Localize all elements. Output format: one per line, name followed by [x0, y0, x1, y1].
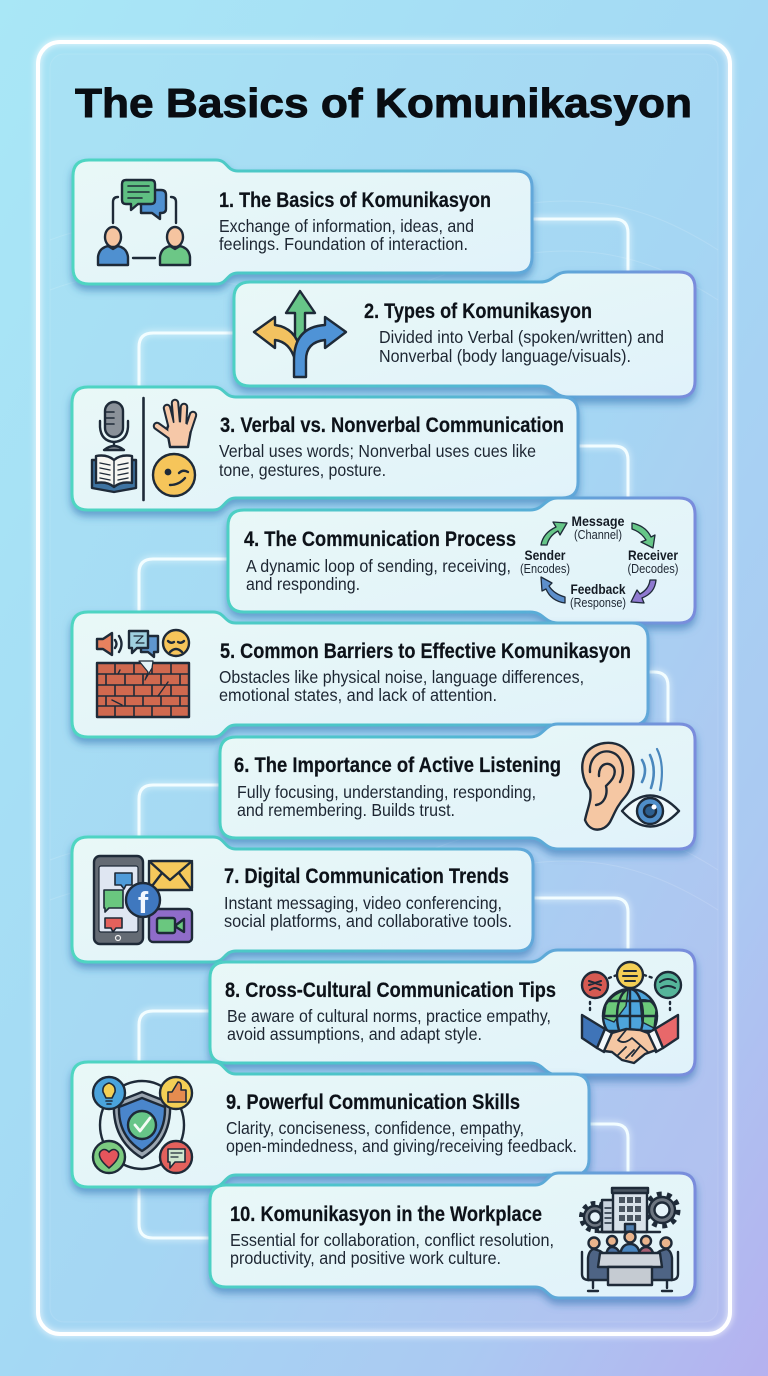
- description 1: [219, 216, 474, 254]
- description 4: and responding.: [246, 574, 360, 594]
- description 1: feelings. Foundation of interaction.: [219, 234, 468, 254]
- description 9: open-mindedness, and giving/receiving feedback.: [226, 1136, 577, 1156]
- description 5: Obstacles like physical noise, language differences,: [219, 667, 584, 687]
- description 8: Be aware of cultural norms, practice empathy,: [227, 1006, 551, 1026]
- heading 7: 7. Digital Communication Trends: [224, 865, 509, 888]
- description 7: social platforms, and collaborative tools.: [224, 911, 512, 931]
- heading 1: 1. The Basics of Komunikasyon: [219, 189, 491, 212]
- description 3: [219, 441, 536, 480]
- process diagram labels: Sender: [524, 547, 566, 563]
- process diagram labels: (Channel): [574, 528, 622, 542]
- panel: 5 barriers: [72, 612, 648, 737]
- heading 10: 10. Komunikasyon in the Workplace: [230, 1203, 542, 1226]
- process diagram labels: (Encodes): [520, 562, 570, 576]
- description 4: [246, 556, 511, 594]
- description 3: tone, gestures, posture.: [219, 460, 386, 480]
- heading 4: 4. The Communication Process: [244, 528, 516, 551]
- icon: mic, book, hand, face: [92, 398, 195, 500]
- icon: globe and handshake: [582, 962, 681, 1063]
- description 10: [230, 1230, 554, 1268]
- icon: brick wall with noise: [97, 630, 189, 717]
- process diagram labels: (Decodes): [628, 562, 678, 576]
- icon: two people talking: [98, 180, 190, 265]
- panel: 9 skills: [72, 1062, 589, 1187]
- description 1: Exchange of information, ideas, and: [219, 216, 474, 236]
- icon: diverging arrows: [254, 291, 346, 377]
- process diagram labels: (Response): [570, 596, 626, 610]
- description 9: [226, 1118, 577, 1156]
- heading 8: 8. Cross-Cultural Communication Tips: [225, 979, 556, 1002]
- description 7: [224, 893, 512, 931]
- heading 3: 3. Verbal vs. Nonverbal Communication: [220, 414, 564, 437]
- description 8: avoid assumptions, and adapt style.: [227, 1024, 482, 1044]
- heading 5: 5. Common Barriers to Effective Komunikasyon: [220, 640, 631, 663]
- panel: 8 cross-cultural: [210, 950, 695, 1075]
- description 6: Fully focusing, understanding, responding,: [237, 782, 536, 802]
- process diagram labels: Receiver: [628, 547, 678, 563]
- description 2: Divided into Verbal (spoken/written) and: [379, 327, 664, 347]
- icon: phone and apps: f: [138, 885, 149, 920]
- heading 9: 9. Powerful Communication Skills: [226, 1091, 520, 1114]
- panel: 4 process: [228, 498, 695, 623]
- description 10: productivity, and positive work culture.: [230, 1248, 501, 1268]
- icon: cycle arrows: [541, 522, 656, 603]
- heading 2: 2. Types of Komunikasyon: [364, 300, 592, 323]
- panel: 10 workplace: [210, 1173, 695, 1298]
- panel: 2 types: [234, 272, 695, 397]
- process diagram labels: [520, 513, 678, 610]
- description 5: [219, 667, 584, 705]
- description 7: Instant messaging, video conferencing,: [224, 893, 502, 913]
- description 3: Verbal uses words; Nonverbal uses cues like: [219, 441, 536, 461]
- panel: 1 basics: [73, 160, 532, 284]
- icon: ear and eye: [582, 743, 679, 830]
- icon: phone and apps: [94, 856, 192, 944]
- description 5: emotional states, and lack of attention.: [219, 685, 497, 705]
- icon: shield with skills: [93, 1077, 192, 1173]
- heading 6: 6. The Importance of Active Listening: [234, 754, 561, 777]
- panel: 3 verbal vs nonverbal: [72, 387, 578, 510]
- description 2: Nonverbal (body language/visuals).: [379, 346, 631, 366]
- panel: 6 active listening: [220, 724, 695, 849]
- description 10: Essential for collaboration, conflict resolution,: [230, 1230, 554, 1250]
- process diagram labels: Message: [572, 513, 625, 529]
- description 2: [379, 327, 664, 366]
- title: The Basics of Komunikasyon: [75, 80, 692, 126]
- description 9: Clarity, conciseness, confidence, empathy,: [226, 1118, 524, 1138]
- panel: 7 digital: [72, 837, 533, 962]
- description 8: [227, 1006, 551, 1044]
- description 6: and remembering. Builds trust.: [237, 800, 455, 820]
- connector lines: [139, 219, 668, 1238]
- icon: office and meeting: [582, 1188, 678, 1291]
- process diagram labels: Feedback: [570, 581, 626, 597]
- description 6: [237, 782, 536, 820]
- description 4: A dynamic loop of sending, receiving,: [246, 556, 511, 576]
